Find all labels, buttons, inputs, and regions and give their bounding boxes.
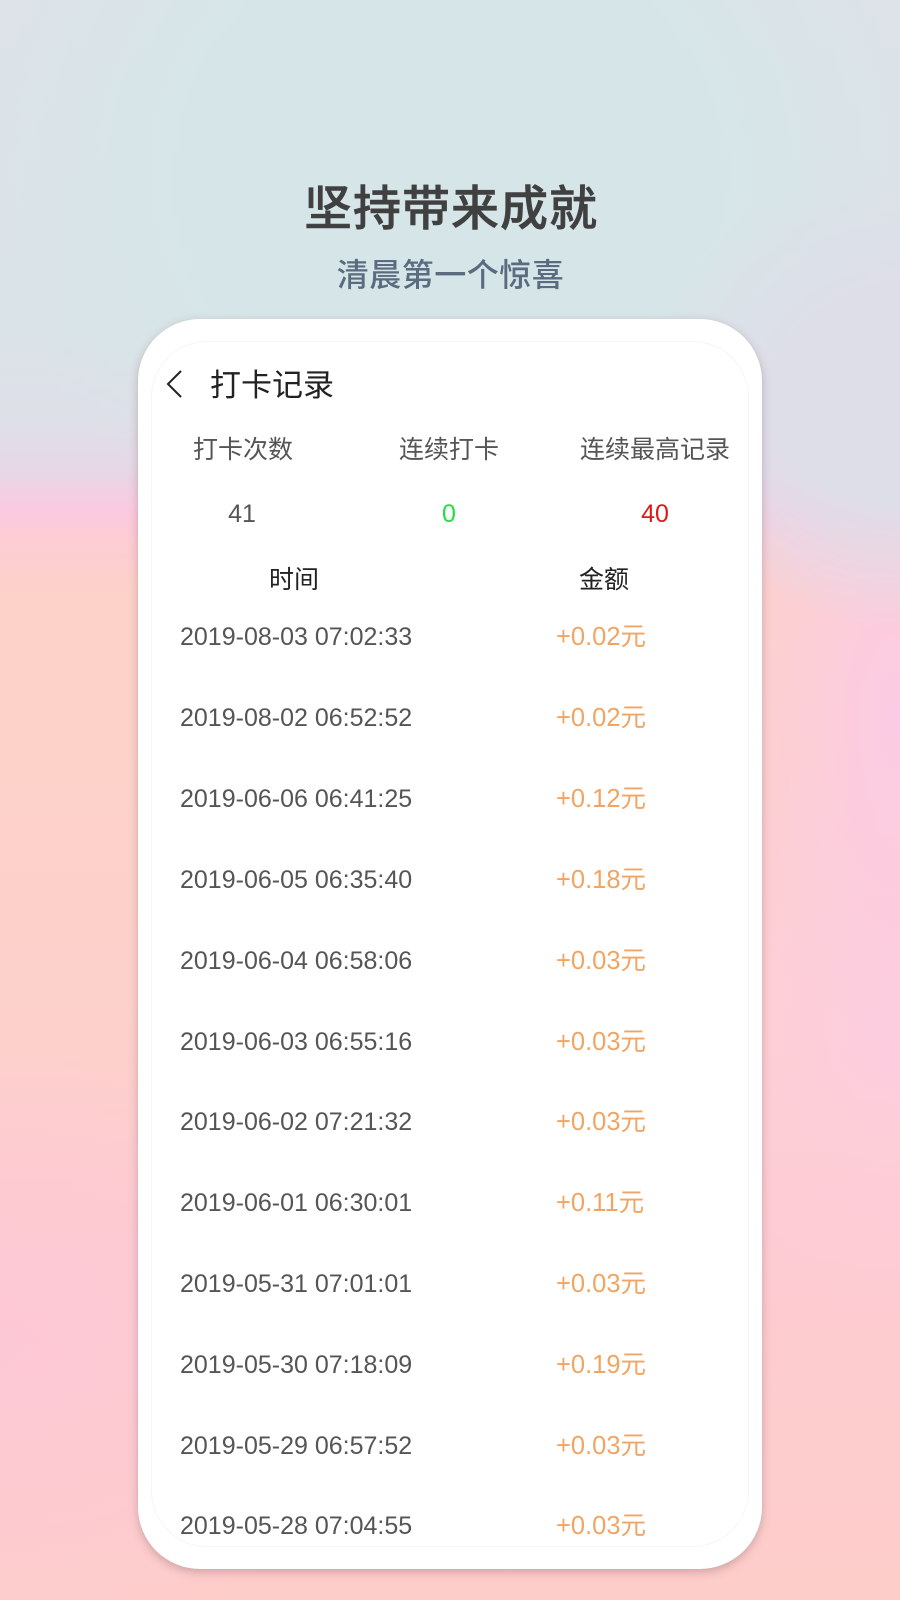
subtitle: 清晨第一个惊喜 <box>337 257 564 293</box>
record table: 2019-06-03 06:55:16 <box>180 1028 412 1056</box>
record table: +0.03元 <box>556 1432 646 1460</box>
record table: +0.11元 <box>556 1189 644 1217</box>
record table: 2019-06-05 06:35:40 <box>180 866 412 894</box>
stat label: check-in count: 打卡次数 <box>193 436 293 464</box>
record table: +0.03元 <box>556 947 646 975</box>
record table: 2019-05-28 07:04:55 <box>180 1512 412 1540</box>
record table: 2019-05-29 06:57:52 <box>180 1432 412 1460</box>
stat value: streak: 0 <box>442 500 456 528</box>
record table: +0.19元 <box>556 1351 646 1379</box>
record table: +0.03元 <box>556 1270 646 1298</box>
phone screen outline <box>151 341 749 1547</box>
column header: amount: 金额 <box>579 566 629 594</box>
stat value: count: 41 <box>228 500 256 528</box>
record table: 2019-06-02 07:21:32 <box>180 1108 412 1136</box>
panel: check-in record card <box>138 319 762 1569</box>
icon: back arrow <box>166 370 182 398</box>
record table: 2019-05-31 07:01:01 <box>180 1270 412 1298</box>
record table: +0.02元 <box>556 704 646 732</box>
screen heading: 打卡记录 <box>210 368 334 403</box>
record table: 2019-06-04 06:58:06 <box>180 947 412 975</box>
stat value: longest: 40 <box>641 500 669 528</box>
stat label: longest streak: 连续最高记录 <box>580 436 730 464</box>
stat label: consecutive check-ins: 连续打卡 <box>399 436 499 464</box>
column header: time: 时间 <box>269 566 319 594</box>
record table: 2019-08-03 07:02:33 <box>180 623 412 651</box>
record table: +0.03元 <box>556 1512 646 1540</box>
record table: 2019-05-30 07:18:09 <box>180 1351 412 1379</box>
record table: +0.18元 <box>556 866 646 894</box>
record table: 2019-06-06 06:41:25 <box>180 785 412 813</box>
record table: +0.12元 <box>556 785 646 813</box>
record table: +0.03元 <box>556 1108 646 1136</box>
record table: 2019-08-02 06:52:52 <box>180 704 412 732</box>
title: 坚持带来成就 <box>304 183 598 236</box>
record table: +0.02元 <box>556 623 646 651</box>
record table: 2019-06-01 06:30:01 <box>180 1189 412 1217</box>
record table <box>180 623 646 1540</box>
record table: +0.03元 <box>556 1028 646 1056</box>
